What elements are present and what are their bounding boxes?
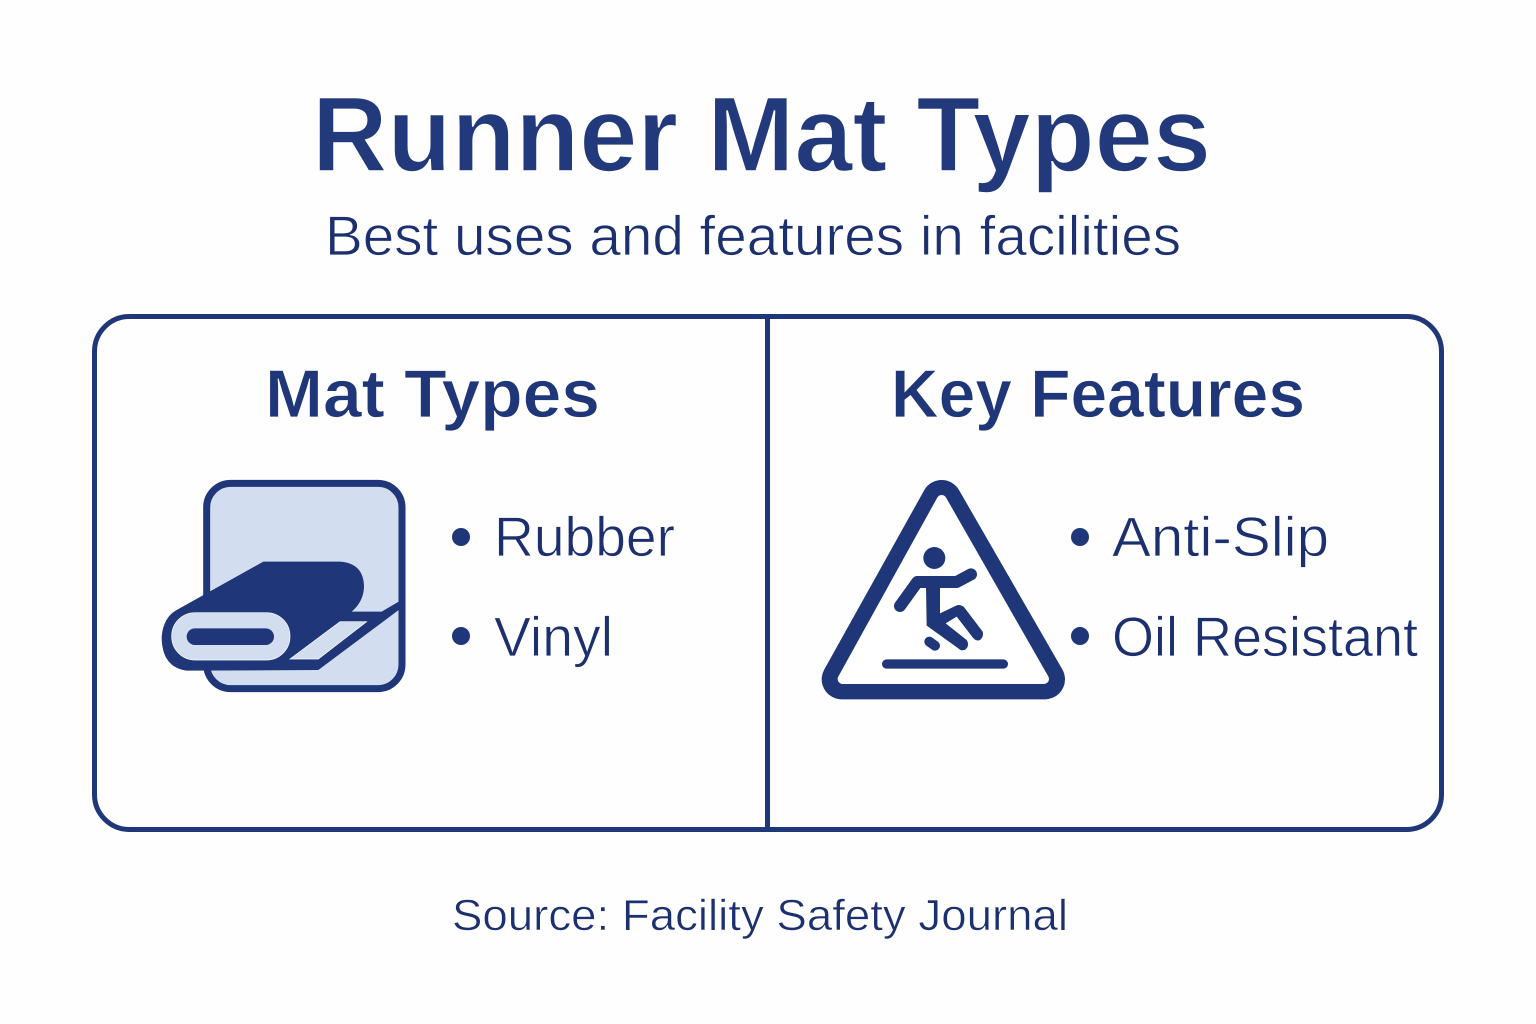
icon: wet floor warning [842, 500, 1045, 679]
bullet list: key features: Oil Resistant [1112, 605, 1418, 668]
bullet list: key features [1071, 505, 1418, 668]
subtitle: Best uses and features in facilities [325, 204, 1181, 267]
source note: Source: Facility Safety Journal [452, 891, 1068, 940]
bullet list: mat types [452, 505, 675, 668]
bullet list: mat types: Rubber [494, 505, 675, 568]
icon: rolled mat [162, 483, 402, 689]
panel: outer frame [94, 316, 1442, 830]
panel divider [765, 317, 770, 829]
bullet list: key features: Anti-Slip [1112, 505, 1329, 568]
bullet list: mat types: Vinyl [494, 605, 613, 668]
panel: mat types [162, 356, 675, 689]
title: Runner Mat Types [312, 74, 1211, 194]
heading: mat types: Mat Types [265, 356, 600, 432]
heading: key features: Key Features [891, 356, 1305, 432]
panel: key features [842, 356, 1418, 679]
